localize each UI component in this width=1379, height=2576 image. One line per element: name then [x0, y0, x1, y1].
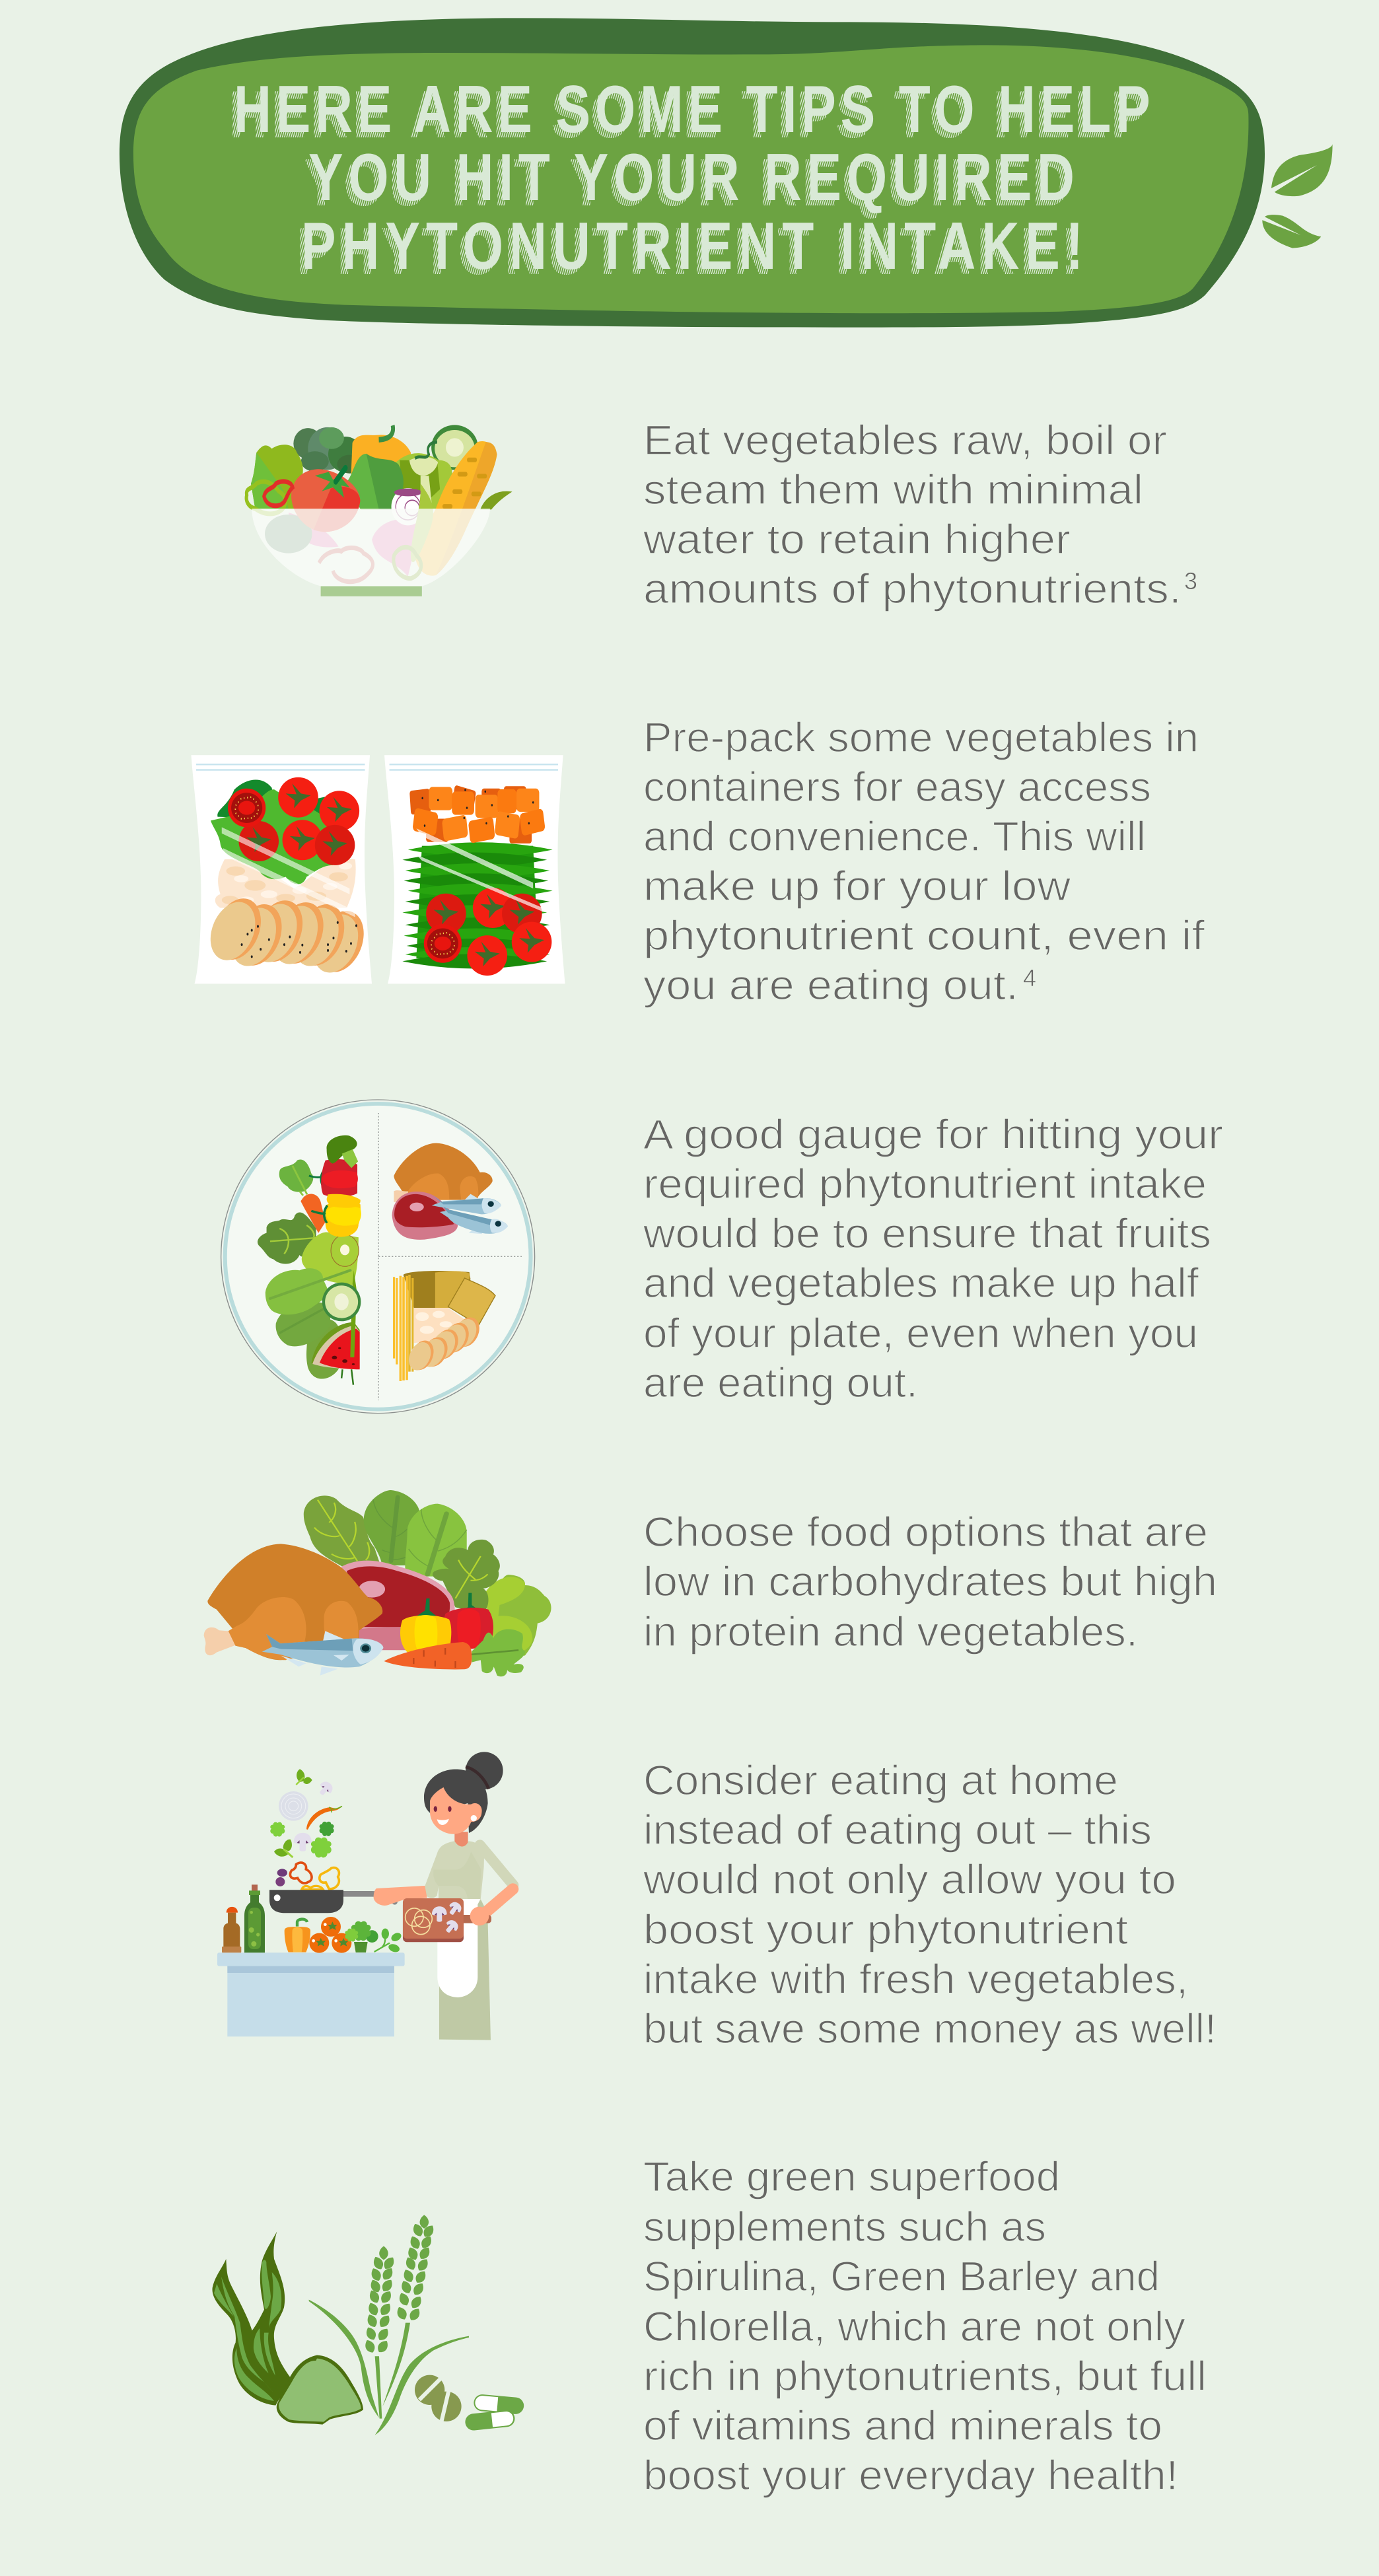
plate	[221, 1100, 535, 1413]
icon: protein and vegetables	[204, 1490, 551, 1676]
tip text 2: 4	[1023, 964, 1036, 991]
tablets	[415, 2375, 462, 2422]
title text: PHYTONUTRIENT INTAKE!	[297, 215, 1078, 289]
carrot with leaves	[384, 1629, 525, 1676]
tip text 5	[643, 1758, 1217, 2052]
tip text 2: make up for your low	[643, 863, 1071, 910]
tip text 3: would be to ensure that fruits	[643, 1211, 1211, 1257]
tip text 6: boost your everyday health!	[643, 2452, 1178, 2499]
icon: salad bowl	[246, 425, 513, 596]
title text: PHYTONUTRIENT INTAKE!	[301, 209, 1083, 283]
tip text 6: Chlorella, which are not only	[643, 2304, 1186, 2350]
title text: YOU HIT YOUR REQUIRED	[304, 146, 1070, 220]
steak	[341, 1561, 455, 1650]
tip text 5: would not only allow you to	[643, 1857, 1176, 1903]
title banner	[120, 18, 1333, 328]
icon: pre-pack bags	[191, 755, 565, 985]
powder mound	[277, 2355, 363, 2425]
protein quarter	[392, 1143, 508, 1240]
tip text 6	[643, 2154, 1207, 2499]
tip text 1: Eat vegetables raw, boil or	[643, 417, 1167, 464]
icon: two leaves	[1262, 144, 1333, 248]
tip text 1: 3	[1184, 567, 1197, 594]
cook figure	[374, 1752, 513, 2040]
tip text 4: low in carbohydrates but high	[643, 1559, 1217, 1605]
left bag	[191, 755, 372, 985]
tip text 2: you are eating out.	[643, 962, 1018, 1009]
seaweed	[212, 2231, 291, 2406]
tip text 3: of your plate, even when you	[643, 1310, 1198, 1357]
title text: HERE ARE SOME TIPS TO HELP	[229, 78, 1146, 152]
capsules	[464, 2394, 524, 2431]
tip text 6: rich in phytonutrients, but full	[643, 2353, 1207, 2400]
tip text 1: steam them with minimal	[643, 467, 1143, 513]
vegetables half	[258, 1135, 361, 1385]
peppers	[400, 1593, 493, 1653]
tip text 1: amounts of phytonutrients.	[643, 566, 1182, 612]
tip text 5: instead of eating out – this	[643, 1807, 1152, 1853]
tip text 6: Take green superfood	[643, 2154, 1060, 2200]
icon: green superfoods	[212, 2215, 524, 2435]
tip text 2: and convenience. This will	[643, 814, 1146, 860]
tip text 6: Spirulina, Green Barley and	[643, 2254, 1160, 2300]
carbohydrates quarter	[393, 1271, 495, 1381]
tip text 2	[643, 715, 1205, 1009]
tip text 3: are eating out.	[643, 1360, 918, 1406]
tip text 2: containers for easy access	[643, 764, 1151, 810]
tip text 3: A good gauge for hitting your	[643, 1112, 1223, 1158]
right bag	[384, 755, 565, 984]
food on counter	[285, 1917, 403, 1954]
roast chicken	[204, 1544, 382, 1660]
tip text 1: water to retain higher	[643, 517, 1071, 563]
title text: HERE ARE SOME TIPS TO HELP	[234, 73, 1150, 147]
tip text 5: Consider eating at home	[643, 1758, 1118, 1804]
tip text 4	[643, 1509, 1217, 1655]
tip text 4: Choose food options that are	[643, 1509, 1208, 1556]
olive oil bottle	[244, 1884, 265, 1952]
tip text 3	[643, 1112, 1223, 1406]
tip text 2: Pre-pack some vegetables in	[643, 715, 1199, 761]
brown bottle	[222, 1907, 241, 1952]
tip text 6: of vitamins and minerals to	[643, 2403, 1162, 2449]
tip text 6: supplements such as	[643, 2204, 1046, 2250]
frying pan	[269, 1890, 395, 1913]
tip text 3: required phytonutrient intake	[643, 1161, 1207, 1207]
barley stalks	[309, 2215, 469, 2435]
leafy greens	[304, 1490, 551, 1656]
tip text 5: but save some money as well!	[643, 2006, 1217, 2052]
title text	[229, 73, 1150, 289]
tip text 5: intake with fresh vegetables,	[643, 1956, 1188, 2003]
fish	[262, 1631, 383, 1676]
tip text 2: phytonutrient count, even if	[643, 913, 1205, 959]
kitchen counter	[217, 1952, 405, 2036]
bowl glass	[252, 509, 490, 586]
tip text 1	[643, 417, 1197, 612]
tip text 5: boost your phytonutrient	[643, 1907, 1129, 1953]
tip text 3: and vegetables make up half	[643, 1260, 1199, 1306]
icon: healthy plate	[221, 1100, 535, 1413]
banner blob	[120, 18, 1265, 328]
tip text 4: in protein and vegetables.	[643, 1609, 1138, 1655]
tossed ingredients	[270, 1769, 342, 1890]
icon: woman cooking	[217, 1752, 513, 2040]
title text: YOU HIT YOUR REQUIRED	[308, 141, 1075, 215]
